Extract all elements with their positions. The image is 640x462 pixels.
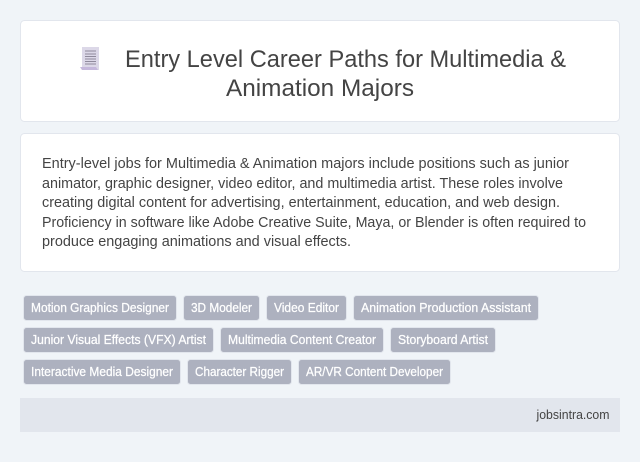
tag: Storyboard Artist: [390, 328, 496, 352]
tag: Interactive Media Designer: Interactive Media Designer: [31, 365, 173, 379]
description text: creating digital content for advertising, entertainment, education, and web design.: [42, 195, 560, 211]
description text: Entry-level jobs for Multimedia & Animation majors include positions such as junior: [42, 156, 569, 172]
icon: document scroll: [80, 47, 99, 70]
tag: AR/VR Content Developer: [298, 360, 450, 384]
panel: title: [20, 20, 620, 122]
tag: Multimedia Content Creator: Multimedia Content Creator: [228, 333, 376, 347]
tag: Animation Production Assistant: Animation Production Assistant: [361, 301, 531, 315]
tag list: [24, 296, 538, 384]
footer text: jobsintra.com: [536, 408, 610, 422]
description text: produce engaging animations and visual effects.: [42, 234, 351, 250]
description text: animator, graphic designer, video editor, and multimedia artist. These roles involve: [42, 176, 563, 192]
description text: Proficiency in software like Adobe Creative Suite, Maya, or Blender is often required to: [42, 215, 586, 231]
tag: Junior Visual Effects (VFX) Artist: Junior Visual Effects (VFX) Artist: [31, 333, 206, 347]
tag: Character Rigger: Character Rigger: [195, 365, 284, 379]
tag: 3D Modeler: 3D Modeler: [191, 301, 252, 315]
tag: Junior Visual Effects (VFX) Artist: [24, 328, 214, 352]
tag: AR/VR Content Developer: AR/VR Content Developer: [306, 365, 443, 379]
title text: [125, 46, 566, 102]
tag: 3D Modeler: [184, 296, 260, 320]
tag: Video Editor: [266, 296, 346, 320]
tag: Interactive Media Designer: [24, 360, 180, 384]
tag: Animation Production Assistant: [354, 296, 538, 320]
title text: Entry Level Career Paths for Multimedia &: [125, 46, 566, 73]
tag: Multimedia Content Creator: [220, 328, 384, 352]
tag: Motion Graphics Designer: Motion Graphics Designer: [31, 301, 169, 315]
tag: Motion Graphics Designer: [24, 296, 176, 320]
title text: Animation Majors: [226, 75, 414, 102]
description text: [42, 156, 586, 250]
tag: Storyboard Artist: Storyboard Artist: [398, 333, 488, 347]
tag: Video Editor: Video Editor: [274, 301, 339, 315]
panel: description: [20, 134, 620, 272]
tag: Character Rigger: [188, 360, 292, 384]
footer: [20, 398, 620, 432]
